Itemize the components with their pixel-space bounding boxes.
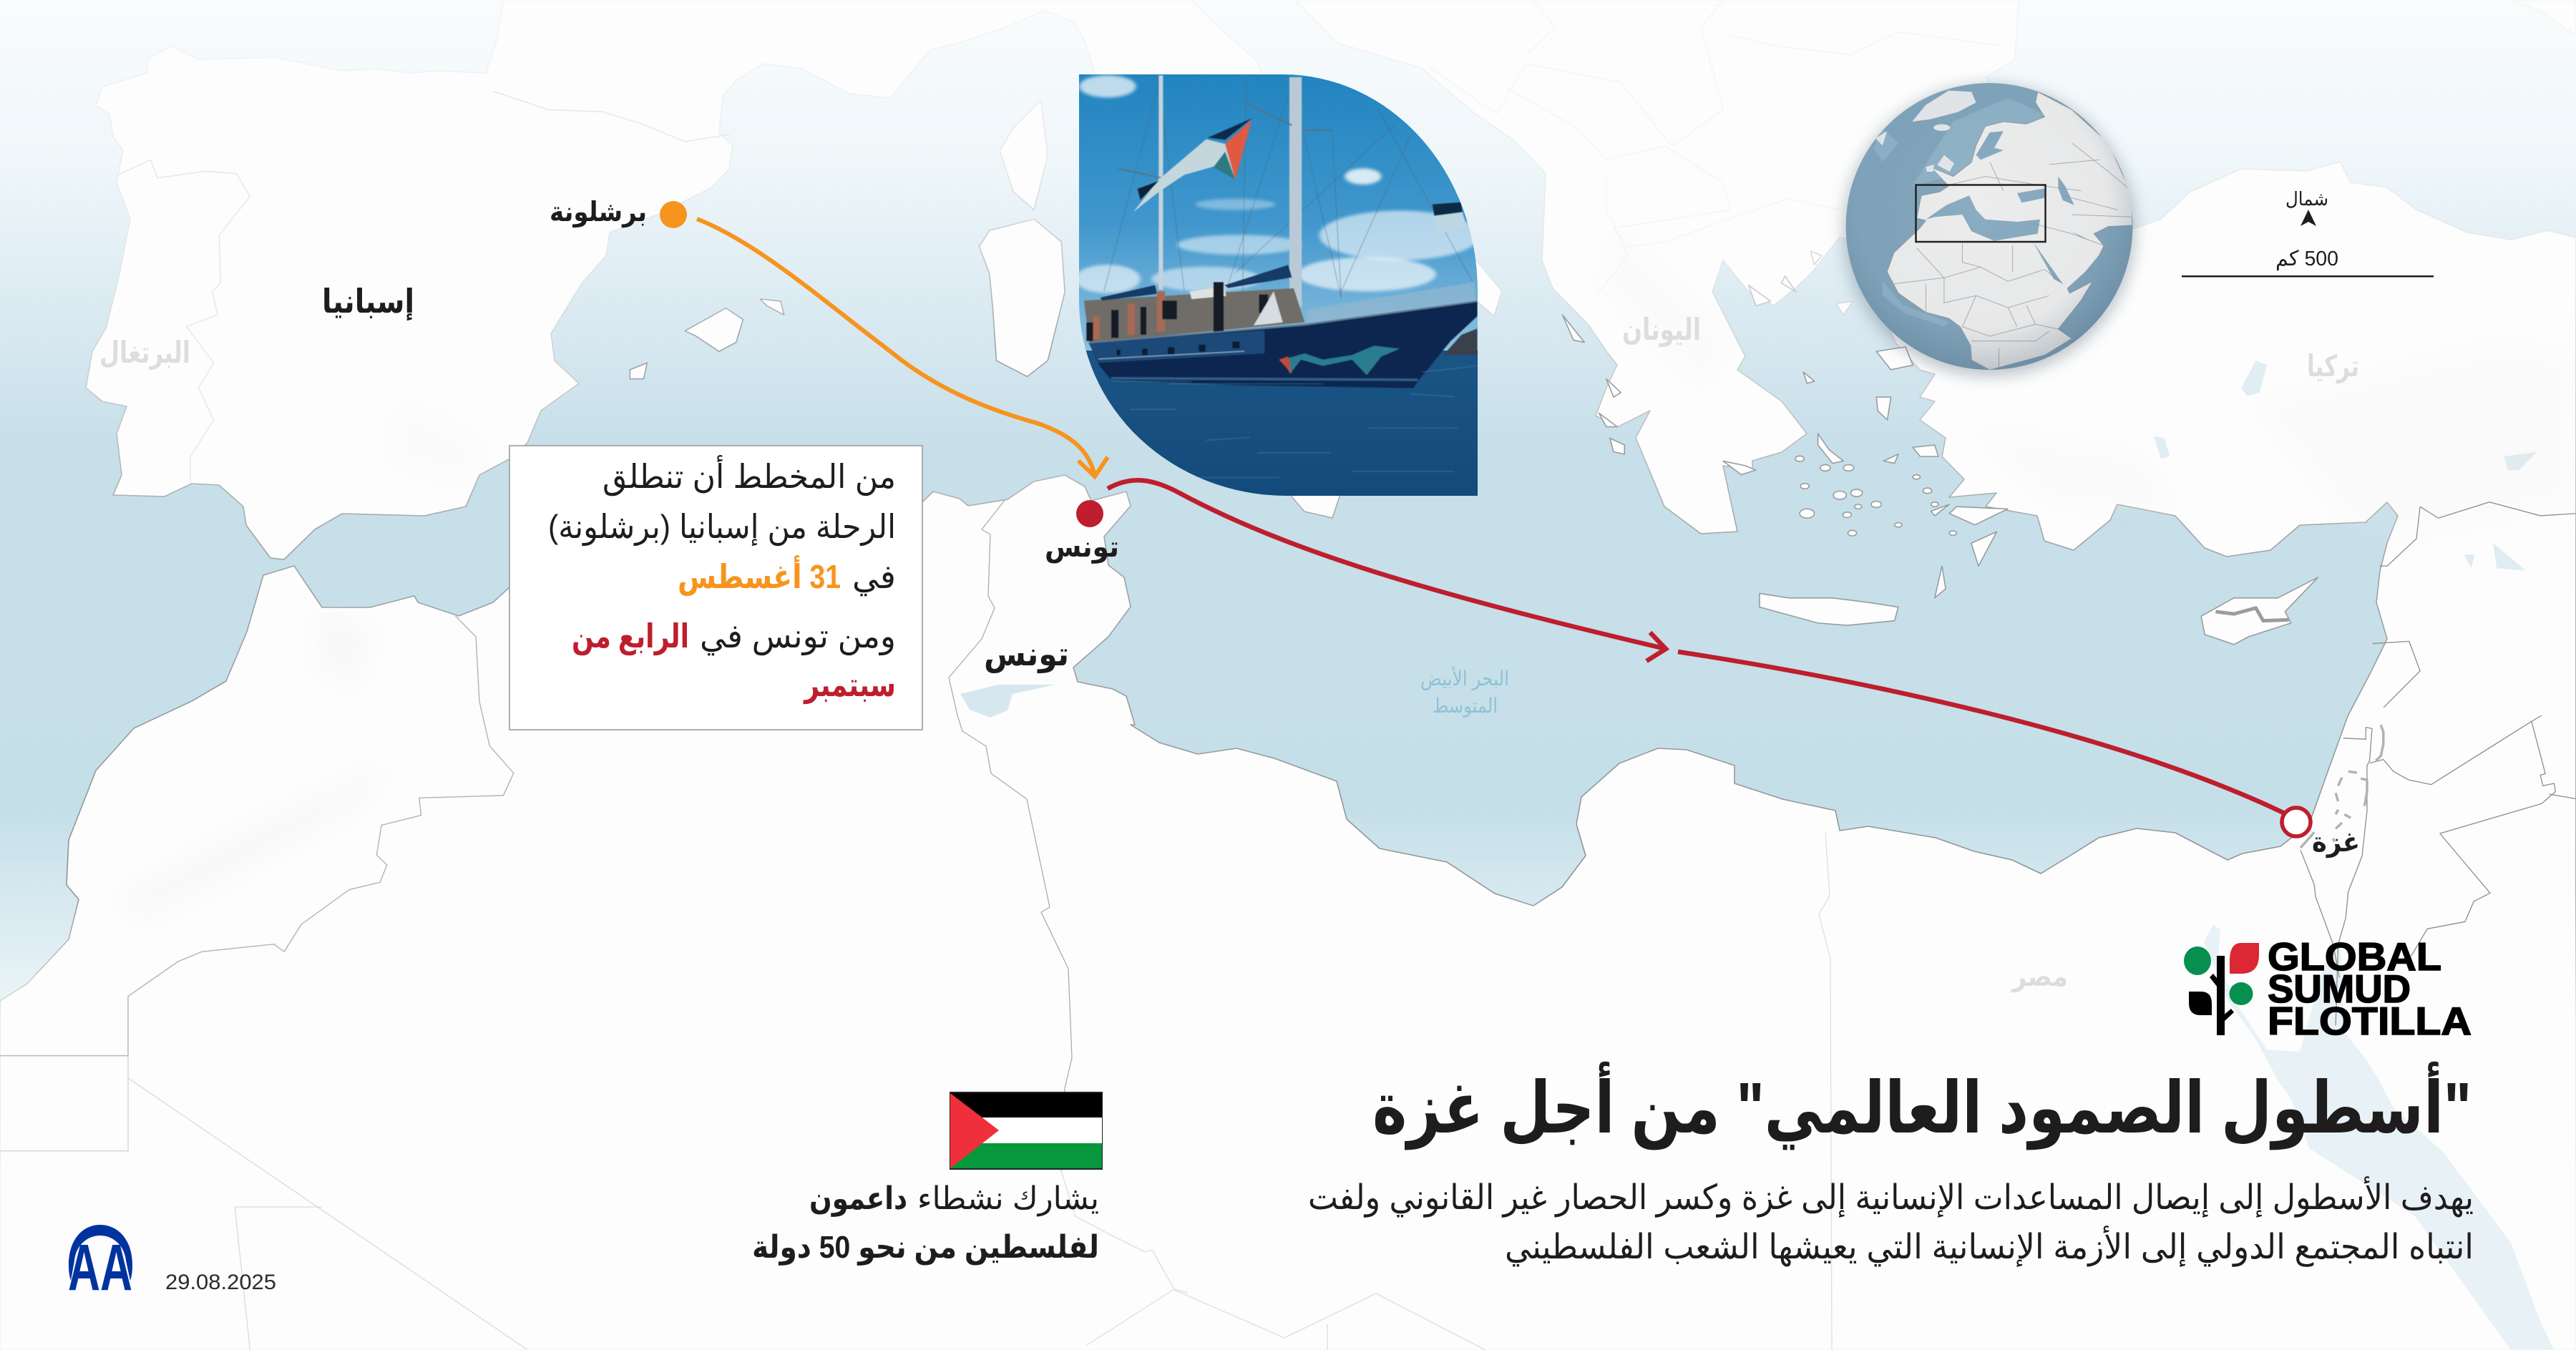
- callout line 2: الرحلة من إسبانيا (برشلونة): [548, 508, 896, 547]
- callout line 4: [572, 617, 896, 656]
- borders: Tunisia, Algeria and Libya: [949, 499, 1072, 1171]
- label: Tunisia country: تونس: [984, 635, 1069, 673]
- description: [1308, 1175, 2474, 1267]
- callout line 3: [678, 555, 896, 597]
- deck and crew: [1084, 288, 1304, 343]
- label: Spain: إسبانيا: [322, 283, 414, 321]
- logo wordmark: FLOTILLA: [2268, 999, 2472, 1043]
- water highlights: [1111, 366, 1478, 478]
- logo wordmark: [2268, 934, 2472, 1043]
- land: Greek islands, Crete and Cyprus: [1563, 251, 2318, 645]
- logo wordmark: SUMUD: [2268, 967, 2411, 1011]
- logo: Anadolu Agency: AA: [68, 1231, 132, 1304]
- globe borders: [1894, 143, 2131, 367]
- label: Egypt: مصر: [2011, 962, 2068, 992]
- globe shadow: [1843, 84, 2135, 376]
- lake: Tunisian chott: [960, 685, 1055, 718]
- land: Sicily: [1281, 458, 1360, 518]
- globe land: Greenland, Iceland and UK: [1875, 91, 1976, 172]
- description: يهدف الأسطول إلى إيصال المساعدات الإنسانية إلى غزة وكسر الحصار غير القانوني ولفت: [1308, 1175, 2474, 1218]
- inset globe: [1843, 83, 2135, 376]
- callout line 1: من المخطط أن تنطلق: [602, 455, 896, 497]
- callout line 4: ومن تونس في: [700, 617, 896, 656]
- label: Mediterranean Sea: المتوسط: [1433, 695, 1498, 718]
- map labels: [99, 197, 2360, 992]
- callout line 3: 31 أغسطس: [678, 555, 841, 596]
- borders: Syria and Turkey: [1431, 0, 2575, 708]
- label: Mediterranean Sea: البحر الأبيض: [1420, 665, 1509, 690]
- globe ocean: [1846, 83, 2132, 370]
- logo: Anadolu Agency: [68, 1225, 132, 1304]
- logo icon: tree: [2184, 943, 2259, 1035]
- logo wordmark: GLOBAL: [2268, 934, 2441, 979]
- label: Gaza: غزة: [2312, 828, 2360, 858]
- land: north-east corner: [2512, 0, 2576, 36]
- callout line 3: في: [852, 558, 896, 597]
- marker: Tunis: [1076, 500, 1103, 527]
- Cyprus buffer line: [2215, 608, 2288, 621]
- caption: participants: [752, 1181, 1099, 1266]
- label: Mediterranean Sea: [1420, 665, 1509, 718]
- caption: participants: داعمون: [809, 1181, 907, 1217]
- logo: Global Sumud Flotilla: [2184, 934, 2472, 1043]
- globe locator rectangle: [1916, 185, 2045, 242]
- hull: [1088, 300, 1478, 388]
- globe shading: [1846, 83, 2132, 370]
- hull decoration: [1283, 346, 1400, 375]
- caption: participants: لفلسطين من نحو 50 دولة: [752, 1230, 1099, 1266]
- flag of Palestine: [950, 1092, 1103, 1170]
- marker: Gaza: [2282, 808, 2311, 836]
- label: Tunis city: تونس: [1045, 532, 1119, 564]
- scale line: [2182, 275, 2434, 278]
- gulfs: Suez, Aqaba and the Red Sea: [2204, 924, 2554, 1350]
- marker: Barcelona: [660, 201, 687, 228]
- land: Corsica, Sardinia and Balearics: [630, 100, 1065, 379]
- route: Tunis to Gaza, first leg: [1108, 480, 1666, 661]
- terrain shading: [122, 229, 2576, 923]
- borders: Levant and Iraq: [2301, 715, 2576, 1025]
- main flag: [1133, 140, 1235, 212]
- second flag: [1433, 202, 1463, 216]
- land: Iberia, France, north-west Italy: [86, 0, 1502, 559]
- route: Tunis to Gaza, second leg: [1678, 652, 2285, 813]
- date: 29.08.2025: [165, 1271, 276, 1294]
- globe land: Europe, Asia and Africa: [1887, 92, 2132, 370]
- globe seas: [1926, 131, 2090, 286]
- label: Greece: اليونان: [1622, 313, 1701, 348]
- borders: Egypt and Sudan: [1819, 833, 1832, 1350]
- borders: Iberia: [117, 92, 729, 484]
- arrowhead: orange: [1078, 457, 1108, 476]
- Golan, West Bank and Gaza dashed lines: [2301, 725, 2384, 848]
- north arrow icon: [2301, 210, 2316, 226]
- north arrow and scale bar: [2182, 188, 2434, 278]
- label: Barcelona: برشلونة: [550, 197, 647, 228]
- caption: participants: يشارك نشطاء: [917, 1181, 1099, 1217]
- callout line 4: الرابع من: [572, 617, 689, 655]
- scale value: 500 كم: [2275, 248, 2338, 271]
- borders: Morocco, Algeria and Western Sahara: [0, 616, 527, 1350]
- lakes and inland water: [960, 361, 2554, 1350]
- description: انتباه المجتمع الدولي إلى الأزمة الإنسانية التي يعيشها الشعب الفلسطيني: [1505, 1225, 2474, 1267]
- lakes: Anatolia: [2154, 361, 2537, 571]
- label: Turkey: تركيا: [2307, 349, 2359, 384]
- photo: sailing boat with Palestinian flag: [1075, 74, 1480, 496]
- arrowhead: red: [1646, 632, 1666, 661]
- label: Portugal: البرتغال: [99, 336, 190, 371]
- globe continental shelf: [1873, 98, 2044, 327]
- main masts: [1158, 76, 1163, 290]
- callout line 5: سبتمبر: [803, 666, 896, 704]
- north label: شمال: [2285, 188, 2328, 210]
- callout box: departure dates: [509, 446, 922, 730]
- route: Barcelona to Tunis: [697, 219, 1108, 476]
